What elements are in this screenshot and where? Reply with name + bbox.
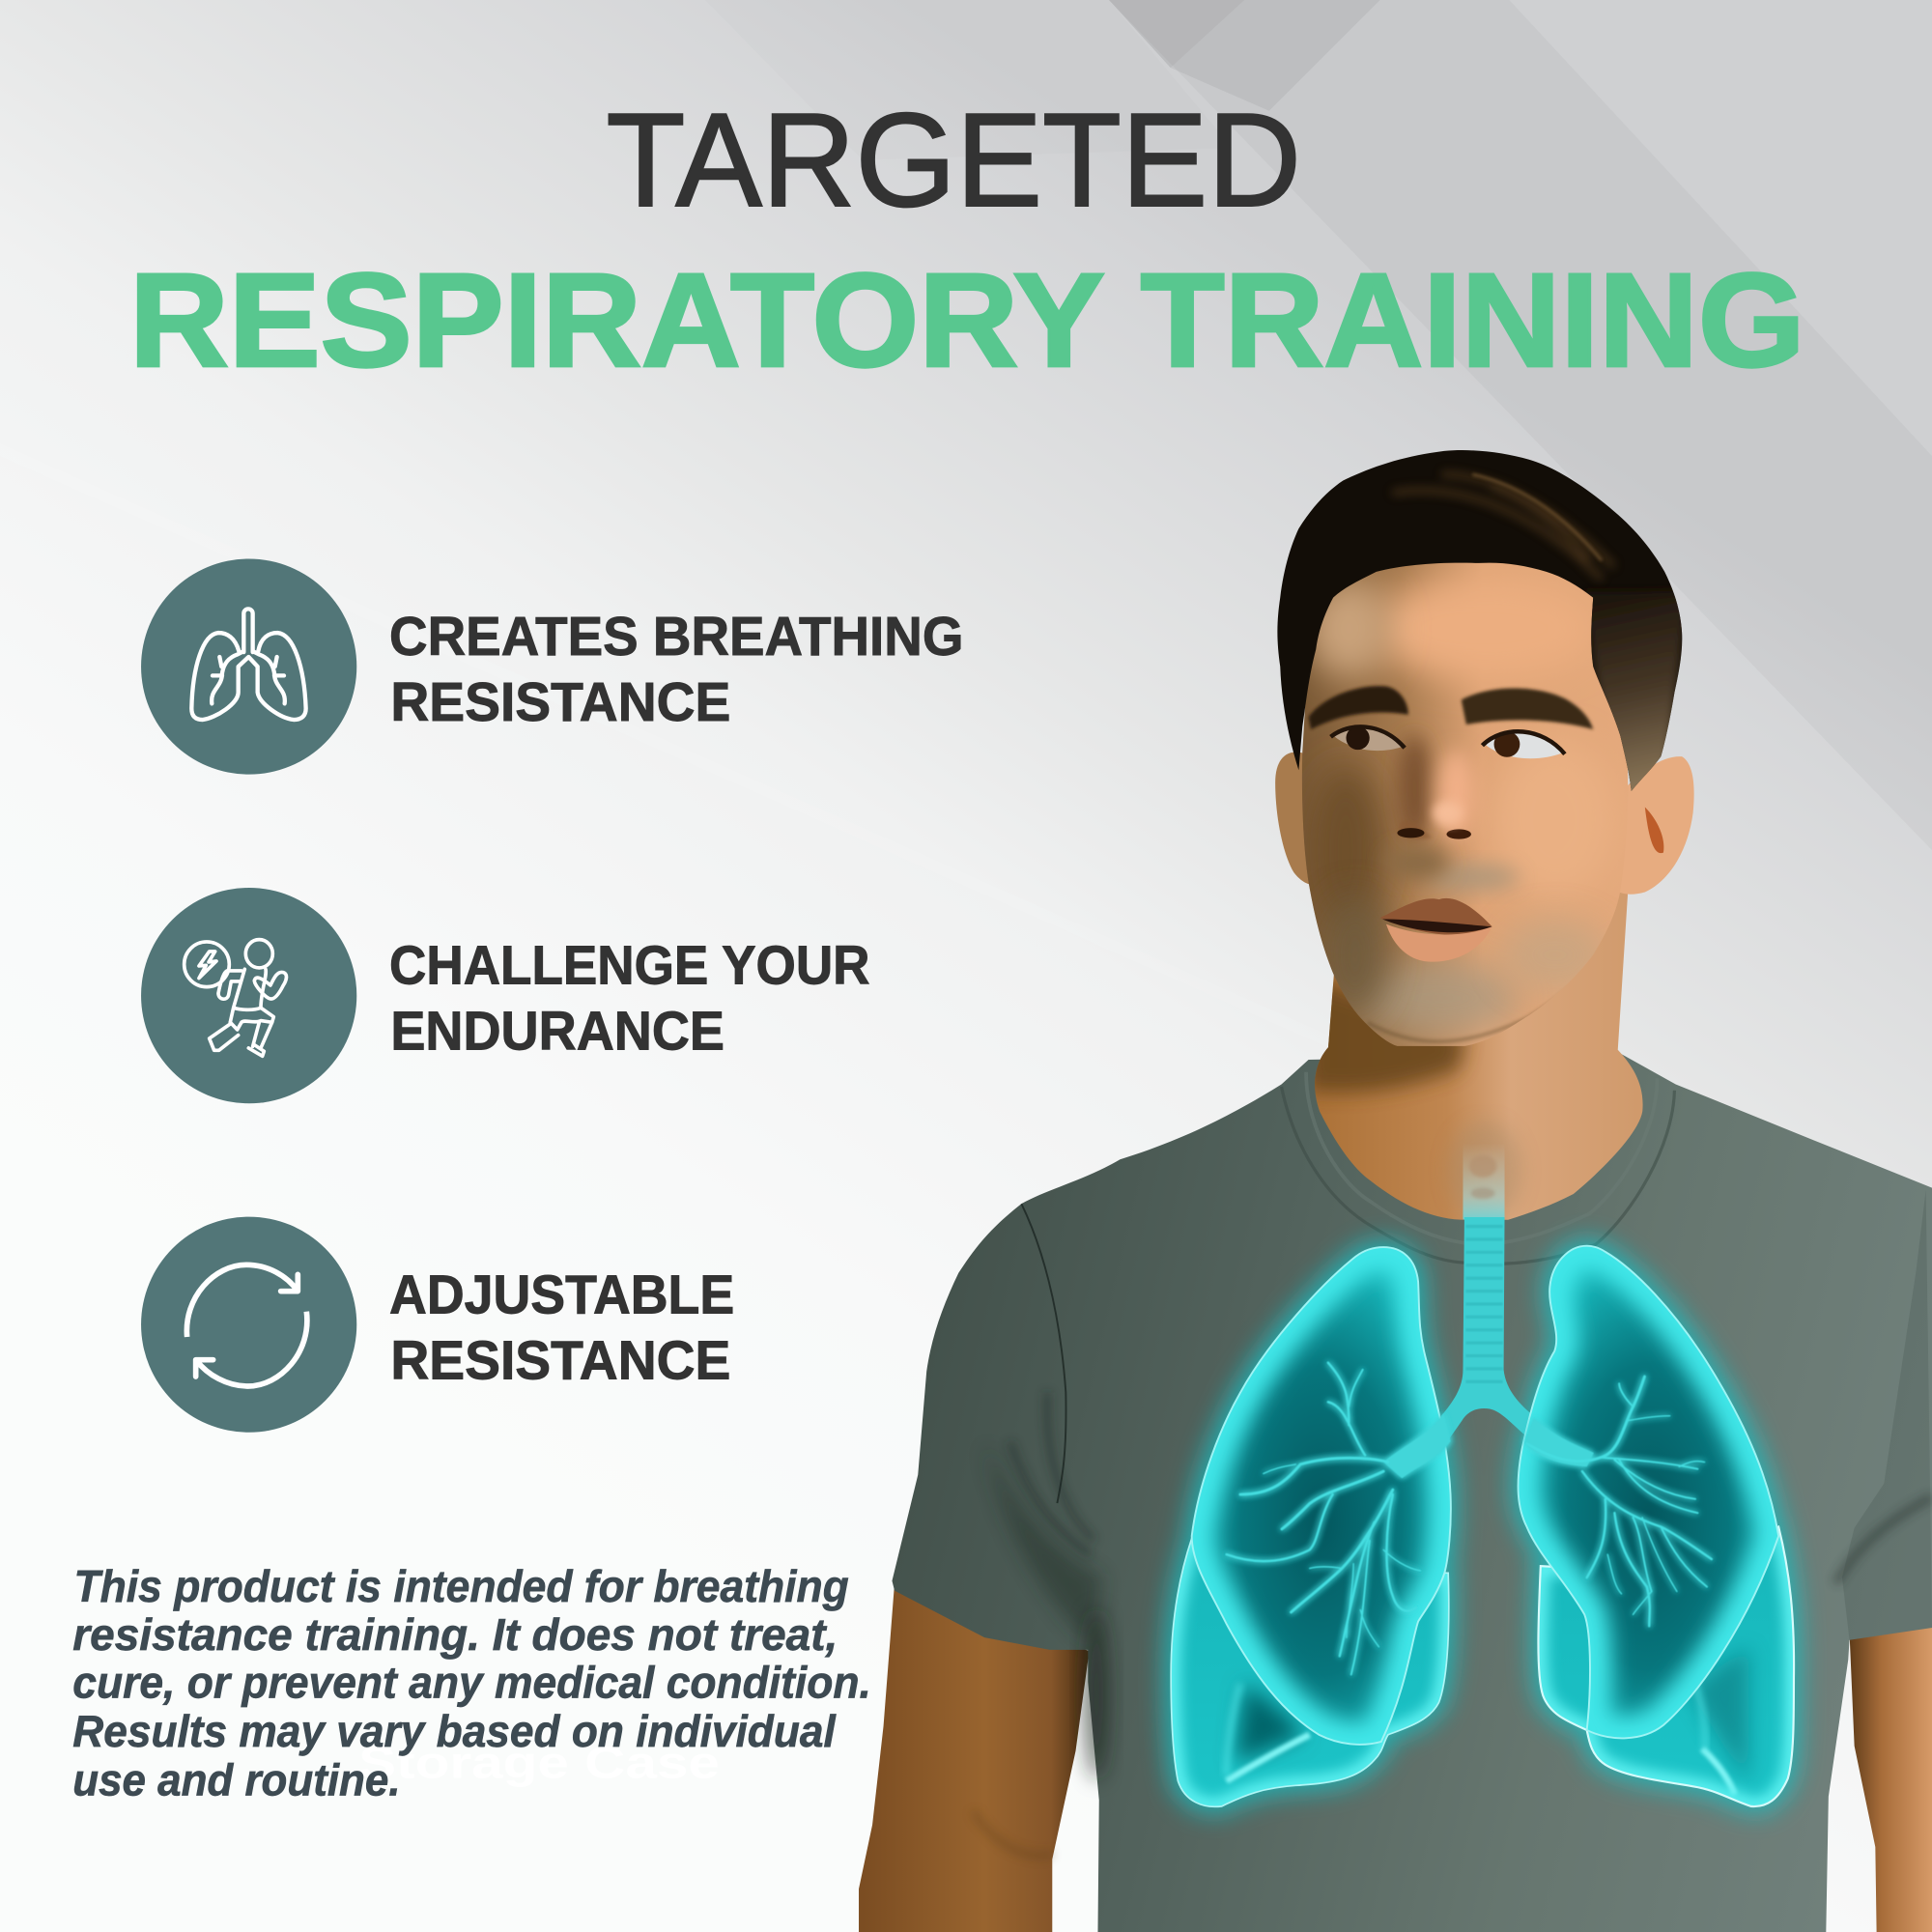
left lower lobe	[1171, 1538, 1449, 1806]
disclaimer text: This product is intended for breathing	[74, 1561, 849, 1611]
disclaimer text	[72, 1561, 871, 1804]
feature 1: creates breathing resistance	[141, 558, 963, 775]
trachea	[1441, 1143, 1534, 1443]
mouth	[1380, 898, 1492, 962]
face	[1302, 542, 1629, 1046]
label text	[389, 935, 870, 1062]
right arm	[1850, 1620, 1932, 1932]
glowing lungs	[1171, 1143, 1794, 1806]
disclaimer text: Results may vary based on individual	[72, 1706, 837, 1756]
label text	[389, 606, 963, 732]
nose	[1397, 801, 1471, 839]
label text: CHALLENGE YOUR	[389, 935, 870, 996]
neck	[1315, 893, 1643, 1220]
right lung	[1519, 1246, 1794, 1806]
right lower lobe	[1538, 1526, 1794, 1806]
background diagonal bands	[0, 0, 1932, 1060]
disclaimer text: use and routine.	[72, 1754, 401, 1804]
eyebrows	[1309, 686, 1593, 729]
right bronchi	[1524, 1377, 1712, 1626]
left arm	[859, 1583, 1090, 1932]
left bronchi	[1227, 1363, 1451, 1675]
disclaimer text: resistance training. It does not treat,	[72, 1609, 838, 1660]
label text: RESISTANCE	[390, 671, 730, 732]
disclaimer text: cure, or prevent any medical condition.	[72, 1658, 871, 1708]
title: TARGETED: TARGETED	[607, 86, 1301, 235]
icon: circular arrows in circle	[141, 1217, 356, 1433]
label text: RESISTANCE	[390, 1329, 730, 1390]
feature 2: challenge your endurance	[141, 888, 870, 1103]
lung glow	[1171, 1246, 1794, 1806]
t-shirt	[892, 1054, 1932, 1932]
title: RESPIRATORY TRAINING: RESPIRATORY TRAINING	[129, 246, 1805, 395]
right upper lobe	[1519, 1246, 1778, 1738]
man with glowing lungs	[859, 450, 1932, 1932]
feature 3: adjustable resistance	[141, 1217, 734, 1433]
label text: CREATES BREATHING	[389, 606, 963, 667]
faint watermark behind disclaimer: Storage Case	[358, 1738, 720, 1788]
label text: ADJUSTABLE	[389, 1264, 734, 1324]
shirt collar	[1282, 1087, 1674, 1264]
label text: ENDURANCE	[390, 1001, 724, 1062]
icon: runner with energy bolt in circle	[141, 888, 356, 1103]
eyes	[1331, 726, 1565, 758]
label text	[389, 1264, 734, 1390]
left upper lobe	[1192, 1247, 1451, 1745]
right ear	[1614, 756, 1694, 895]
hair	[1277, 450, 1688, 801]
left ear	[1275, 752, 1314, 885]
collar inner rib	[1306, 1072, 1658, 1244]
left lung	[1171, 1247, 1451, 1806]
icon: lungs in circle	[141, 558, 356, 775]
